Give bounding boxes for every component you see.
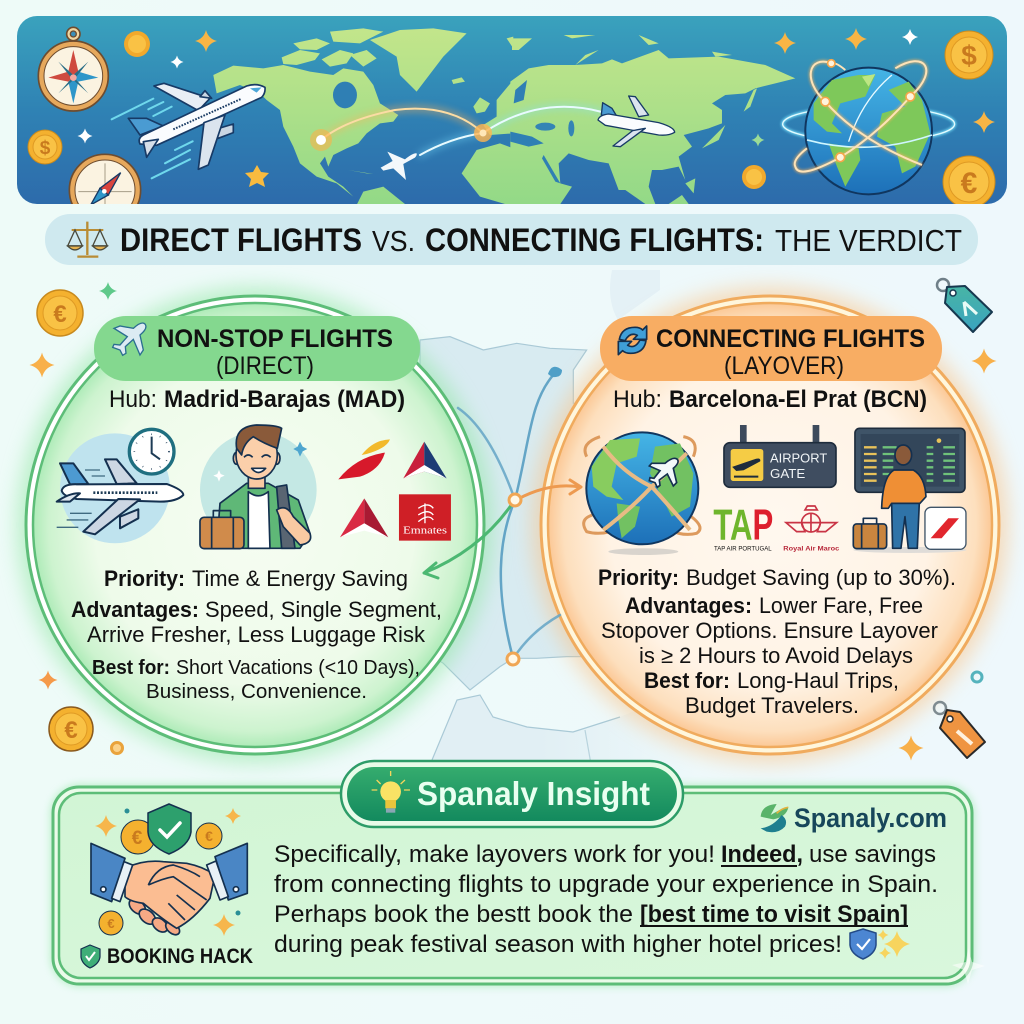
text: connecting details: Budget Saving (up to 30%).: [686, 565, 956, 590]
logo: TAP Air Portugal: TAP AIR PORTUGAL: [714, 546, 772, 553]
map: Eurasia and Africa: [510, 35, 795, 204]
text: connecting details: [598, 565, 956, 718]
logo: Spanaly.com: [761, 803, 947, 833]
heading pill: connecting: [600, 316, 942, 381]
coins and shield above handshake: €: [205, 828, 213, 844]
logo text: Spanaly.com: [794, 803, 947, 833]
illustration: departure board with traveller: [853, 428, 967, 553]
text: connecting details: Best for:: [644, 668, 730, 693]
icon: balance scales: [68, 222, 107, 257]
insight body text: during peak festival season with higher hotel prices!: [274, 931, 842, 958]
route: orange arc: [321, 109, 483, 140]
illustration: airport gate sign: [724, 425, 836, 487]
heading text: CONNECTING FLIGHTS: [656, 325, 925, 353]
icon: small white plane: [381, 152, 417, 180]
decoration: coin euro lower left: €: [64, 717, 78, 744]
coin: dollar right: [945, 31, 993, 79]
logo: Emirates: Emnates: [403, 525, 447, 536]
routes between hubs: [458, 367, 562, 659]
hub: Barcelona: Barcelona-El Prat (BCN): [669, 386, 927, 413]
insight body text: from connecting flights to upgrade your experience in Spain.: [274, 871, 938, 898]
airline logos: direct: [338, 439, 451, 541]
illustration: plane and clock: [57, 429, 183, 543]
heading pill: non-stop: [94, 316, 420, 381]
coins and shield above handshake: €: [132, 828, 143, 849]
text: non-stop details: Speed, Single Segment,: [205, 597, 442, 622]
insight body text: Indeed,: [721, 841, 803, 868]
title text: DIRECT FLIGHTS: [120, 222, 362, 258]
text: non-stop details: Short Vacations (<10 Days),: [176, 657, 420, 679]
illustration: smiling traveller: [200, 425, 317, 549]
coins and shield above handshake: [95, 804, 241, 936]
text: non-stop details: Advantages:: [71, 597, 199, 622]
title bar: [45, 214, 978, 265]
title text: VS.: [372, 226, 415, 258]
illustration: globe with plane: [584, 432, 700, 555]
route nodes: [310, 124, 492, 151]
text: non-stop details: [71, 566, 442, 703]
icon: compass top: [38, 27, 108, 111]
text: connecting details: Budget Travelers.: [685, 693, 859, 718]
coin: dollar left: $: [40, 138, 51, 159]
hub: Barcelona: Hub:: [613, 386, 662, 413]
decoration: teal price tag: [937, 279, 992, 332]
coin: small top: [124, 31, 150, 57]
panel: connecting flights circle: [532, 287, 1008, 763]
label: booking hack: BOOKING HACK: [107, 945, 253, 968]
speed lines: [112, 99, 193, 178]
text: connecting details: Long-Haul Trips,: [737, 668, 899, 693]
title text: CONNECTING FLIGHTS:: [425, 222, 764, 258]
banner: world map: [17, 16, 1007, 204]
route: blue arc: [420, 107, 602, 155]
node: southern route: [507, 653, 519, 665]
coin: euro right: €: [961, 167, 978, 200]
text: connecting details: Lower Fare, Free: [759, 593, 923, 618]
icon: sparkles emoji: [878, 930, 910, 959]
logo: Royal Air Maroc: [783, 506, 840, 553]
decoration: orange price tag: [934, 702, 985, 758]
sub heading: (DIRECT): [216, 352, 314, 380]
coin: small lower: [742, 165, 766, 189]
text: non-stop details: Best for:: [92, 657, 170, 679]
text: connecting details: Priority:: [598, 565, 679, 590]
icon: blue shield: [850, 929, 876, 959]
map: Americas and Greenland: [213, 28, 513, 205]
insight body text: use savings: [809, 841, 936, 868]
decoration: sparkles: [30, 282, 996, 760]
logo: red triangle: [340, 498, 388, 537]
node: Madrid route: [509, 494, 521, 506]
badge: Spanaly Insight: [341, 761, 683, 827]
panel: non-stop flights circle: [17, 287, 493, 763]
logo: Royal Air Maroc: Royal Air Maroc: [783, 546, 840, 553]
logo: Iberia style: [338, 439, 390, 479]
illustration: handshake: [91, 843, 247, 937]
text: non-stop details: Business, Convenience.: [146, 681, 367, 703]
decoration: coin euro upper left: [37, 290, 83, 336]
sub heading: (LAYOVER): [724, 352, 844, 380]
panel: Spanaly insight: [50, 784, 985, 987]
logo mark: [761, 804, 788, 832]
heading text: NON-STOP FLIGHTS: [157, 325, 393, 353]
coin: dollar right: $: [961, 40, 977, 71]
text: connecting details: Stopover Options. Ensure Layover: [601, 618, 938, 643]
text: non-stop details: Arrive Fresher, Less Luggage Risk: [87, 622, 426, 647]
badge text: Spanaly Insight: [417, 775, 650, 812]
icon: compass bottom: [68, 154, 142, 204]
decoration: coin euro lower left: [49, 707, 93, 751]
logo: TAP Air Portugal: TAP: [713, 501, 773, 549]
hub: Madrid: Madrid-Barajas (MAD): [164, 386, 405, 413]
text: connecting details: Advantages:: [625, 593, 752, 618]
title text: THE VERDICT: [775, 223, 962, 258]
insight body text: Perhaps book the bestt book the: [274, 901, 633, 928]
illustration: airport gate sign: GATE: [770, 466, 805, 481]
coins and shield above handshake: €: [107, 916, 115, 931]
arrow: to non-stop flights: [424, 504, 512, 578]
icon: main airplane: [128, 83, 265, 169]
insight body text: [best time to visit Spain]: [640, 901, 908, 928]
coin: dollar left: [28, 130, 62, 164]
illustration: airport gate sign: AIRPORT: [770, 450, 827, 465]
text: connecting details: is ≥ 2 Hours to Avoid Delays: [639, 643, 913, 668]
background map of Spain: [400, 270, 700, 787]
sparkles and star in banner: [78, 28, 995, 187]
title text: [120, 222, 962, 258]
icon: light bulb: [372, 771, 410, 813]
icon: globe with orbits: [783, 60, 955, 194]
hub: Madrid: Hub:: [109, 386, 157, 413]
coin: euro right: [943, 156, 995, 208]
icon: second plane: [598, 96, 675, 147]
insight body text: [274, 841, 938, 958]
decoration: coin euro upper left: €: [53, 301, 67, 328]
logo: navy and red triangle: [403, 442, 447, 478]
icon: plane: [113, 323, 146, 355]
text: non-stop details: Priority:: [104, 566, 185, 591]
icon: refresh arrows: [618, 326, 647, 355]
insight body text: Specifically, make layovers work for you!: [274, 841, 715, 868]
decoration: small rings: [112, 672, 982, 754]
arrow: to connecting flights: [518, 480, 581, 499]
text: non-stop details: Time & Energy Saving: [192, 566, 408, 591]
